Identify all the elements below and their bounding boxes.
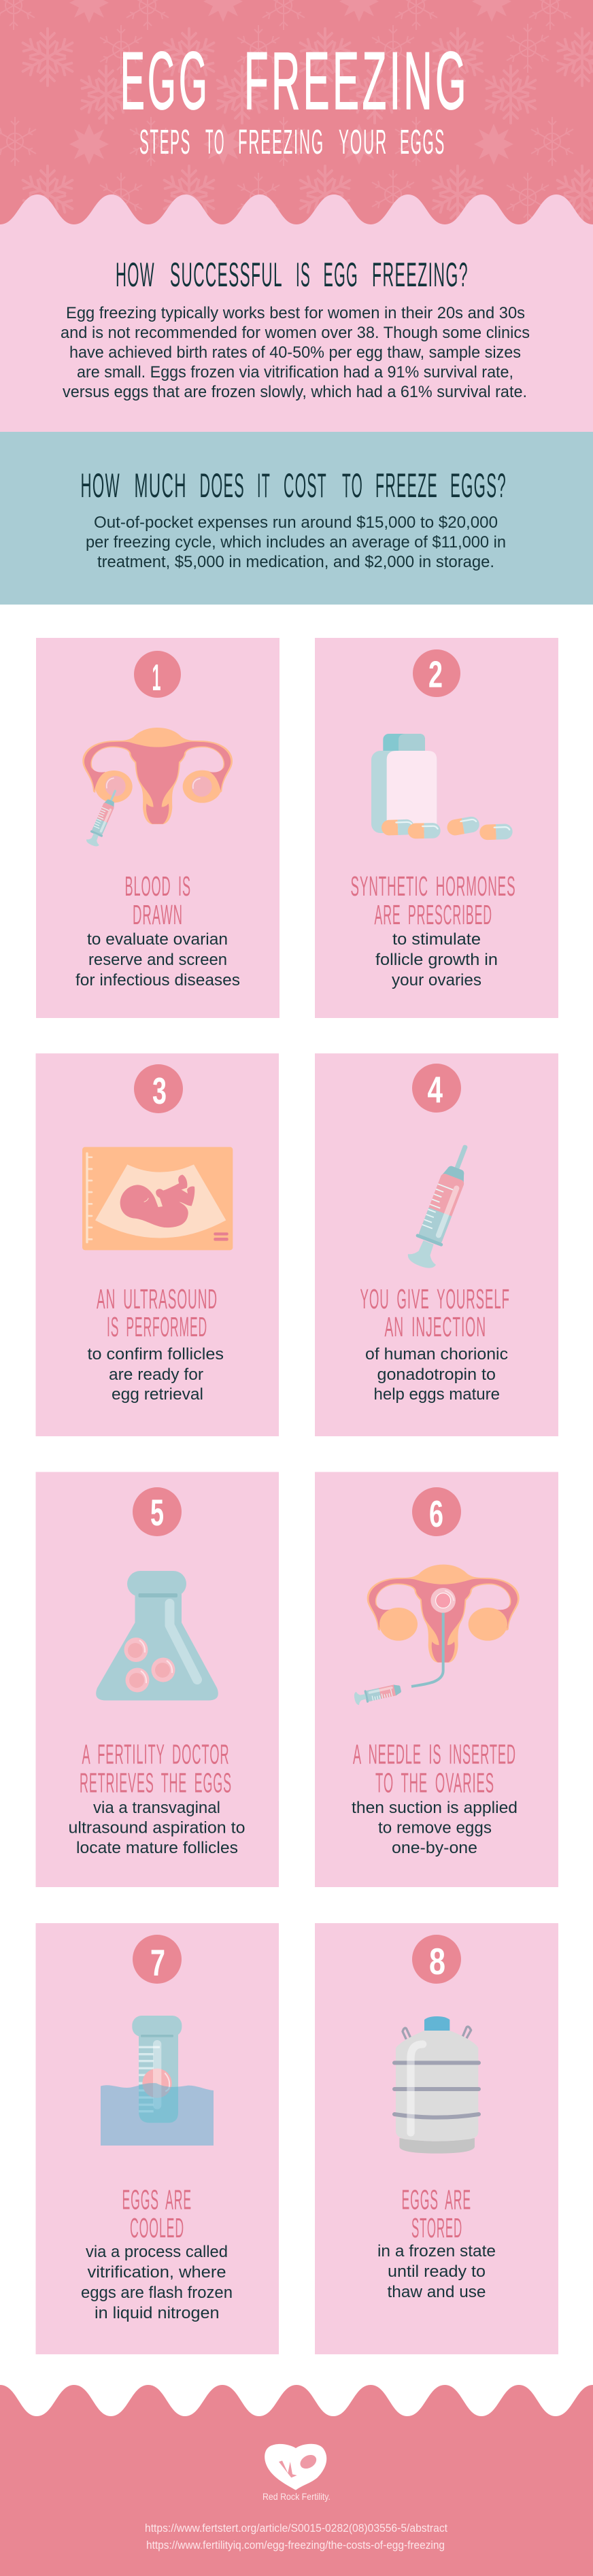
step title — [351, 870, 515, 930]
step text: follicle growth in — [375, 951, 498, 969]
icon: uterus with needle and syringe — [353, 1565, 520, 1706]
panel: how successful — [0, 194, 593, 433]
step text — [377, 2242, 496, 2301]
panel: step 5: A FERTILITY DOCTOR — [82, 1738, 230, 1769]
icon: pill bottle and capsules — [371, 734, 513, 840]
step text — [375, 930, 498, 989]
step text: help eggs mature — [374, 1385, 500, 1404]
logo: Red Rock Fertility — [262, 2444, 331, 2502]
source links: https://www.fertstert.org/article/S0015-0282(08)03556-5/abstract — [145, 2522, 447, 2535]
icon: flask with eggs — [96, 1571, 218, 1700]
step text: locate mature follicles — [76, 1839, 238, 1857]
egg — [125, 1667, 150, 1692]
subtitle: FREEZING — [238, 122, 324, 161]
step number 5 — [133, 1487, 182, 1536]
subtitle: YOUR — [339, 122, 388, 161]
panel: step 5 — [35, 1472, 279, 1887]
step text: thaw and use — [388, 2283, 486, 2301]
step text: to confirm follicles — [87, 1345, 224, 1363]
step text: of human chorionic — [365, 1345, 508, 1363]
text block: cost details: per freezing cycle, which includes an average of $11,000 in — [86, 533, 506, 552]
step title — [80, 1738, 232, 1798]
panel: step 5: RETRIEVES THE EGGS — [80, 1767, 232, 1798]
subtitle: STEPS — [139, 122, 191, 161]
title — [120, 35, 469, 126]
step number 8 — [412, 1935, 461, 1984]
panel: step 8: STORED — [411, 2212, 462, 2243]
step number 4: 4 — [427, 1068, 443, 1111]
source links — [145, 2522, 447, 2552]
panel: step 6 — [315, 1472, 558, 1887]
subtitle: TO — [205, 122, 225, 161]
heading: cost: TO — [342, 467, 363, 505]
heading: cost: COST — [284, 467, 327, 505]
text block: success details — [61, 304, 530, 401]
heading: how successful: HOW — [116, 256, 155, 294]
step text: your ovaries — [392, 971, 481, 989]
text block: success details: Egg freezing typically works best for women in their 20s and 30s — [66, 304, 525, 322]
step text: in liquid nitrogen — [95, 2304, 219, 2322]
heading: cost: MUCH — [135, 467, 187, 505]
heading: cost: IT — [257, 467, 271, 505]
panel: footer — [0, 2385, 593, 2576]
panel: step 1: BLOOD IS — [125, 870, 191, 902]
step text: to remove eggs — [378, 1818, 492, 1837]
step text: egg retrieval — [112, 1385, 203, 1404]
panel: step 3: AN ULTRASOUND — [97, 1283, 218, 1315]
step number 8: 8 — [429, 1940, 445, 1982]
step number 7 — [133, 1935, 182, 1984]
text block: success details: versus eggs that are frozen slowly, which had a 61% survival rate. — [63, 383, 527, 401]
step number 5: 5 — [150, 1491, 164, 1533]
panel: cost: EGGS? — [450, 467, 507, 505]
infographic: EGGS — [400, 122, 445, 161]
step number 3 — [134, 1064, 183, 1113]
panel: step 7: COOLED — [130, 2212, 184, 2243]
step text: reserve and screen — [88, 951, 227, 969]
step title — [401, 2184, 471, 2243]
panel: step 1 — [36, 638, 279, 1018]
icon: cryogenic tank — [394, 2016, 479, 2154]
step number 6: 6 — [429, 1493, 443, 1535]
icon: ultrasound scan — [82, 1147, 233, 1250]
heading: cost: HOW — [80, 467, 120, 505]
panel: step 2 — [315, 638, 558, 1018]
step title — [353, 1738, 516, 1798]
step title — [360, 1283, 510, 1342]
step number 6 — [412, 1487, 461, 1536]
text block: success details: have achieved birth rates of 40-50% per egg thaw, sample sizes — [69, 343, 521, 362]
step title: DRAWN — [133, 899, 183, 930]
step text: until ready to — [388, 2263, 486, 2281]
step number 7: 7 — [150, 1942, 165, 1984]
header banner — [0, 0, 593, 235]
heading: cost: DOES — [200, 467, 245, 505]
step text: ultrasound aspiration to — [68, 1818, 245, 1837]
panel: step 8 — [315, 1923, 558, 2354]
panel: step 8: EGGS ARE — [401, 2184, 471, 2216]
heading: how successful: IS — [296, 256, 311, 294]
text block: cost details — [86, 513, 506, 571]
logo: Red Rock Fertility: Red Rock Fertility. — [262, 2491, 331, 2502]
step text — [68, 1799, 245, 1857]
step text — [87, 1345, 224, 1404]
step text: via a process called — [86, 2243, 228, 2261]
source links: https://www.fertilityiq.com/egg-freezing/the-costs-of-egg-freezing — [146, 2539, 445, 2552]
step title — [125, 870, 191, 930]
step text: to stimulate — [392, 930, 481, 949]
text block: success details: are small. Eggs frozen via vitrification had a 91% survival rate, — [77, 363, 513, 382]
icon: uterus with syringe — [82, 728, 233, 848]
step text — [352, 1799, 518, 1857]
step text — [81, 2243, 233, 2322]
panel: step 3 — [35, 1053, 279, 1436]
icon: syringe — [405, 1140, 480, 1271]
text block: cost details: treatment, $5,000 in medication, and $2,000 in storage. — [97, 553, 494, 571]
step text: eggs are flash frozen — [81, 2284, 233, 2302]
step text: in a frozen state — [377, 2242, 496, 2260]
step text: for infectious diseases — [75, 971, 240, 989]
step number 2 — [413, 649, 460, 697]
heading: cost — [80, 467, 507, 505]
step title — [122, 2184, 192, 2243]
subtitle — [139, 122, 445, 161]
step title — [97, 1283, 218, 1342]
step text: to evaluate ovarian — [87, 930, 228, 949]
step text: vitrification, where — [87, 2263, 226, 2282]
title: EGG — [120, 35, 210, 126]
panel: cost — [0, 432, 593, 605]
step text: gonadotropin to — [377, 1366, 496, 1384]
step text: via a transvaginal — [93, 1799, 220, 1817]
step number 3: 3 — [152, 1070, 167, 1112]
panel: step 7 — [35, 1923, 279, 2354]
step number 1 — [134, 651, 181, 698]
step number 2: 2 — [428, 653, 443, 695]
egg — [124, 1638, 148, 1662]
heading: cost: FREEZE — [375, 467, 438, 505]
step number 4 — [412, 1064, 461, 1113]
text block: success details: and is not recommended for women over 38. Though some clinics — [61, 324, 530, 342]
step text: are ready for — [109, 1366, 203, 1384]
panel: step 4 — [315, 1053, 558, 1436]
heading: how successful: SUCCESSFUL — [170, 256, 283, 294]
step number 1: 1 — [152, 656, 160, 698]
heading: how successful: EGG — [324, 256, 358, 294]
panel: how successful: FREEZING? — [372, 256, 469, 294]
panel: step 3: IS PERFORMED — [107, 1311, 207, 1342]
panel: step 7: EGGS ARE — [122, 2184, 192, 2216]
step text — [365, 1345, 508, 1404]
text block: cost details: Out-of-pocket expenses run around $15,000 to $20,000 — [94, 513, 498, 532]
step text: then suction is applied — [352, 1799, 518, 1817]
egg — [151, 1658, 175, 1682]
icon: test tube in liquid nitrogen — [101, 2016, 214, 2146]
step text: one-by-one — [392, 1839, 477, 1857]
step text — [75, 930, 240, 989]
